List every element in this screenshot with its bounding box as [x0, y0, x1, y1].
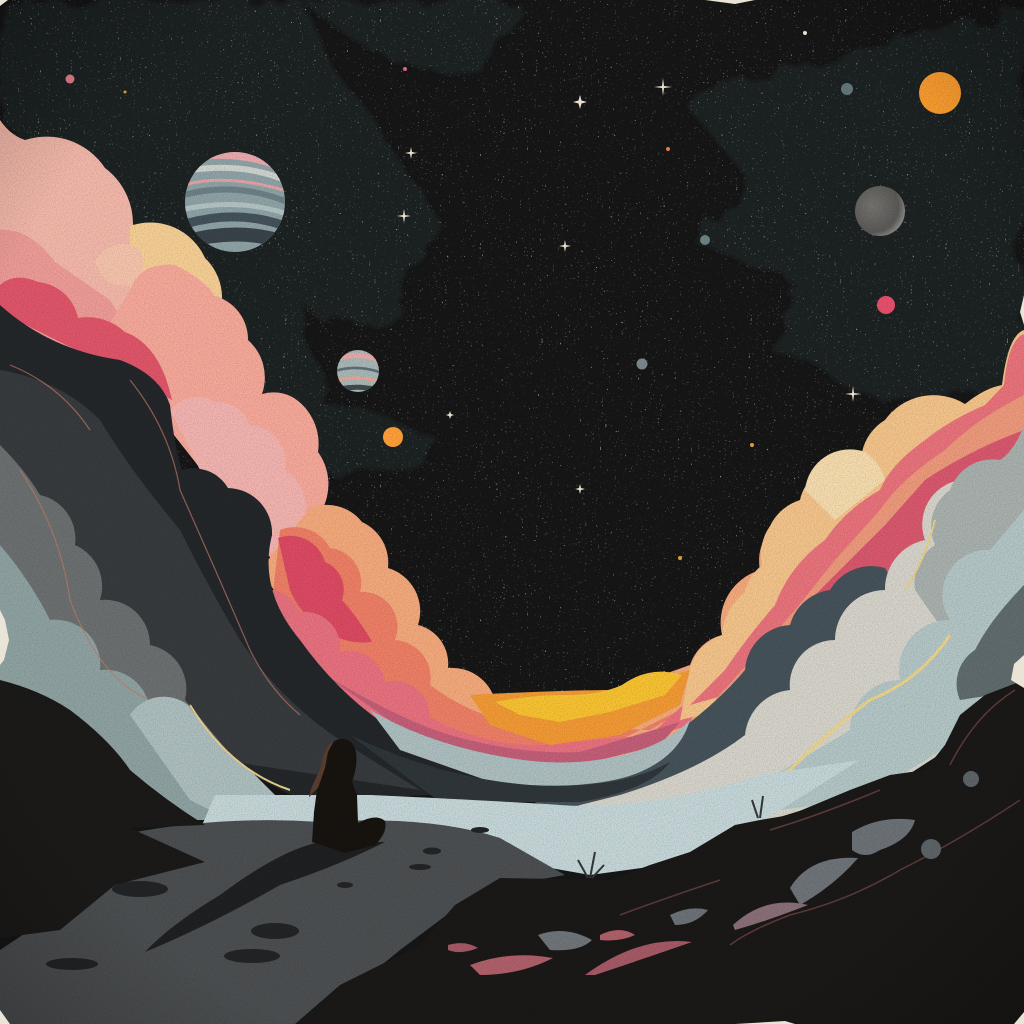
- silhouette body: [309, 739, 386, 853]
- planet: small orange left: [383, 427, 403, 447]
- planet: orange sun: [919, 72, 961, 114]
- dark valley rim: [350, 735, 670, 802]
- charcoal mass: [0, 305, 560, 800]
- peach inner stripe: [715, 395, 1024, 700]
- planet: pink: [877, 296, 895, 314]
- clouds: valley warm layers: [260, 505, 860, 770]
- crimson pocket: [278, 536, 372, 642]
- hair highlight: [309, 741, 334, 797]
- peach outer valley: [260, 505, 860, 760]
- grey cumulus corner: [914, 425, 1024, 640]
- coral band: [270, 527, 700, 770]
- clouds: right warm layers: [680, 330, 1024, 720]
- pink outer bands: [690, 334, 1024, 705]
- pale pink cumulus: [0, 120, 190, 420]
- deep pink stripe: [730, 430, 1024, 695]
- clouds: left warm layers: [0, 120, 340, 570]
- grey foreground path: [0, 820, 565, 1024]
- clouds: left dark layers: [0, 305, 560, 825]
- footprints on path: [46, 827, 489, 970]
- pale slate cumulus: [0, 545, 240, 820]
- peach outer cumulus: [680, 330, 1024, 720]
- yellow cumulus: [130, 222, 222, 350]
- cream cumulus: [560, 470, 1024, 860]
- mauve rim: [320, 672, 680, 770]
- orange valley core: [470, 670, 690, 745]
- pink lower band: [262, 590, 700, 765]
- clouds: right cool layers: [190, 425, 1024, 860]
- light pink lower lobe: [170, 397, 306, 560]
- thin copper veins: [10, 365, 300, 715]
- dark slate band: [480, 566, 950, 805]
- hot pink stripe: [0, 278, 172, 400]
- hillside veins: [620, 690, 1020, 945]
- figure shadow: [145, 842, 385, 952]
- tiny planets: [66, 74, 853, 370]
- seated figure with long hair: [309, 739, 386, 853]
- yellow glow: [495, 672, 682, 722]
- salmon inner cumulus: [0, 230, 170, 400]
- dark grey corner: [957, 585, 1024, 700]
- planet: grey cratered: [855, 186, 905, 236]
- right dark hillside: [295, 680, 1024, 1024]
- plant sprigs: [578, 796, 763, 878]
- dark grey inner: [0, 370, 420, 790]
- yellow vein 2: [190, 520, 935, 790]
- frozen ground: [200, 760, 860, 875]
- cream lobe: [805, 449, 885, 520]
- planet: large striped: [180, 152, 290, 252]
- pale blue-grey valley stripe: [370, 710, 690, 786]
- mid grey cumulus: [0, 445, 260, 800]
- pale teal cumulus: [700, 510, 1024, 820]
- planet: medium striped: [337, 350, 379, 392]
- yellow vein: [690, 635, 950, 810]
- rocks on right hillside: [448, 771, 979, 975]
- bright stars: [124, 31, 861, 560]
- lighter slate lobe: [130, 697, 280, 825]
- left dark hill: [0, 680, 205, 938]
- cream soft lobe: [95, 244, 143, 286]
- peach main band: [100, 265, 340, 570]
